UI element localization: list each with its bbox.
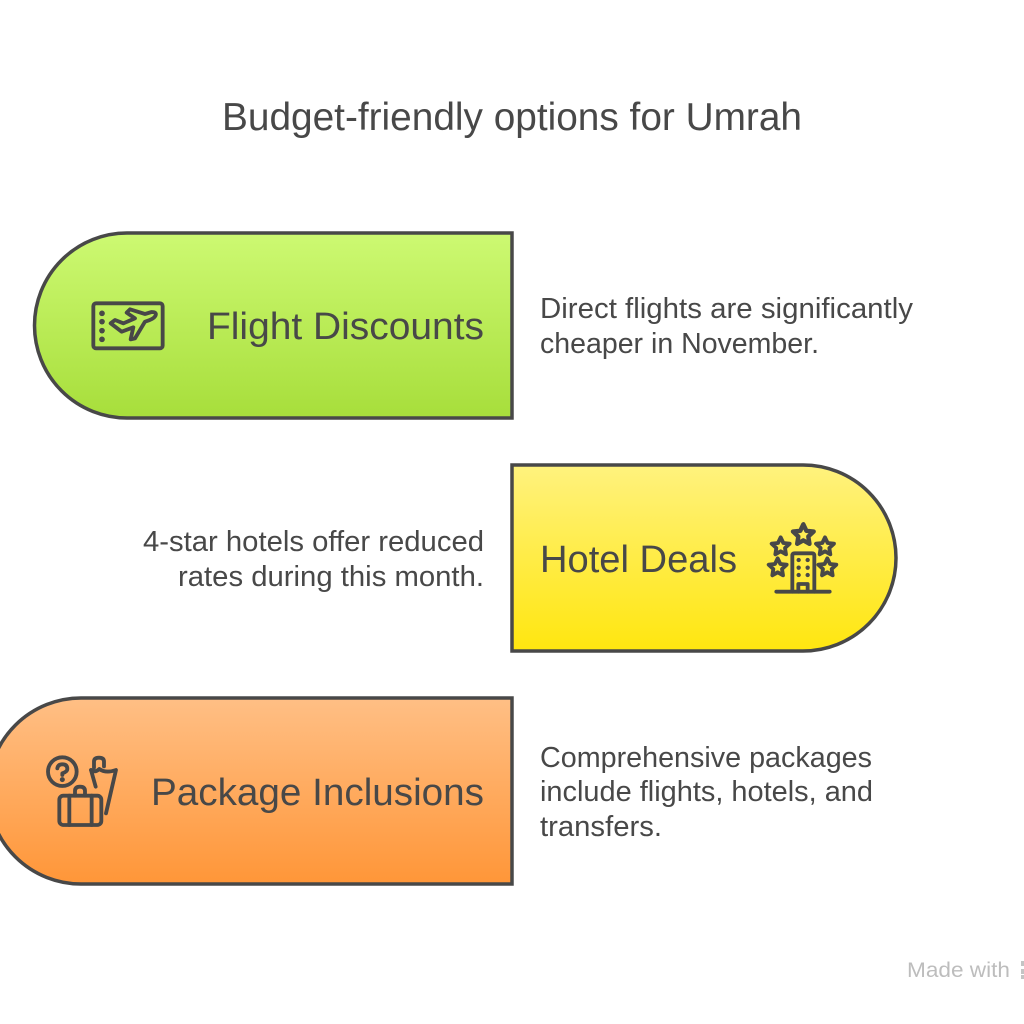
text block: hotel description: [143, 526, 484, 593]
title: Budget-friendly options for Umrah: [222, 96, 802, 139]
heading: hotel deals: Hotel Deals: [540, 539, 737, 581]
text block: hotel description: rates during this month.: [178, 561, 484, 593]
text block: flight description: [540, 293, 914, 360]
icon: luggage, umbrella and question mark: [48, 757, 116, 825]
panel: hotel deals: [512, 465, 896, 651]
icon: plane ticket: [93, 303, 163, 348]
text block: package description: [540, 742, 873, 843]
text block: package description: transfers.: [540, 811, 662, 843]
yellow pill shape: [512, 465, 896, 651]
orange pill shape: [0, 698, 512, 884]
text block: hotel description: 4-star hotels offer reduced: [143, 526, 484, 558]
text block: flight description: cheaper in November.: [540, 328, 819, 360]
panel: package inclusions: [0, 698, 512, 884]
text block: package description: include flights, hotels, and: [540, 776, 873, 808]
green pill shape: [34, 233, 512, 418]
text block: package description: Comprehensive packages: [540, 742, 872, 774]
watermark: made with: Made with: [907, 959, 1010, 982]
text block: flight description: Direct flights are significantly: [540, 293, 914, 325]
heading: package inclusions: Package Inclusions: [151, 772, 484, 814]
panel: flight discounts: [34, 233, 512, 418]
icon: hotel with stars: [769, 524, 836, 592]
heading: flight discounts: Flight Discounts: [207, 306, 484, 348]
